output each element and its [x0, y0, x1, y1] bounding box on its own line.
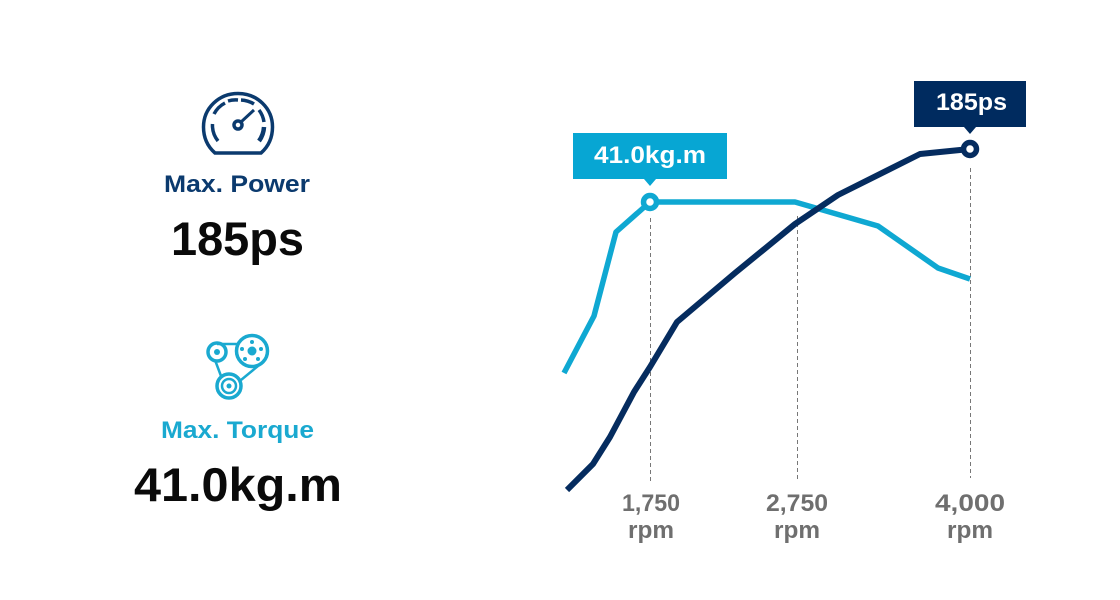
torque curve [564, 202, 970, 373]
axis label: 1,750 rpm: 1,750 [622, 490, 680, 517]
marker: power peak [964, 142, 976, 156]
axis label: 2,750 rpm [766, 490, 828, 544]
callout: torque [573, 133, 727, 186]
callout: power: 185ps [936, 89, 1007, 116]
axis label: 1,750 rpm [622, 490, 680, 544]
axis label: 4,000 rpm [935, 490, 1005, 544]
axis label: 4,000 rpm: rpm [947, 517, 993, 544]
power curve [567, 149, 970, 490]
value: 41.0kg.m: 41.0kg.m [134, 458, 342, 511]
chart: power and torque curves [564, 81, 1026, 544]
axis label: 2,750 rpm: rpm [774, 517, 820, 544]
panel: max power [164, 94, 310, 265]
axis label: 1,750 rpm: rpm [628, 517, 674, 544]
icon: belt pulleys [208, 336, 268, 398]
axis label: 2,750 rpm: 2,750 [766, 490, 828, 517]
icon: speedometer [204, 94, 272, 153]
callout: power [914, 81, 1026, 134]
value: 185ps: 185ps [171, 212, 304, 265]
callout: torque: 41.0kg.m [594, 142, 706, 169]
axis label: 4,000 rpm: 4,000 [935, 490, 1005, 517]
label: max power: Max. Power [164, 171, 310, 198]
marker: torque peak [644, 196, 656, 208]
label: max torque: Max. Torque [161, 417, 314, 444]
panel: max torque [134, 336, 342, 511]
